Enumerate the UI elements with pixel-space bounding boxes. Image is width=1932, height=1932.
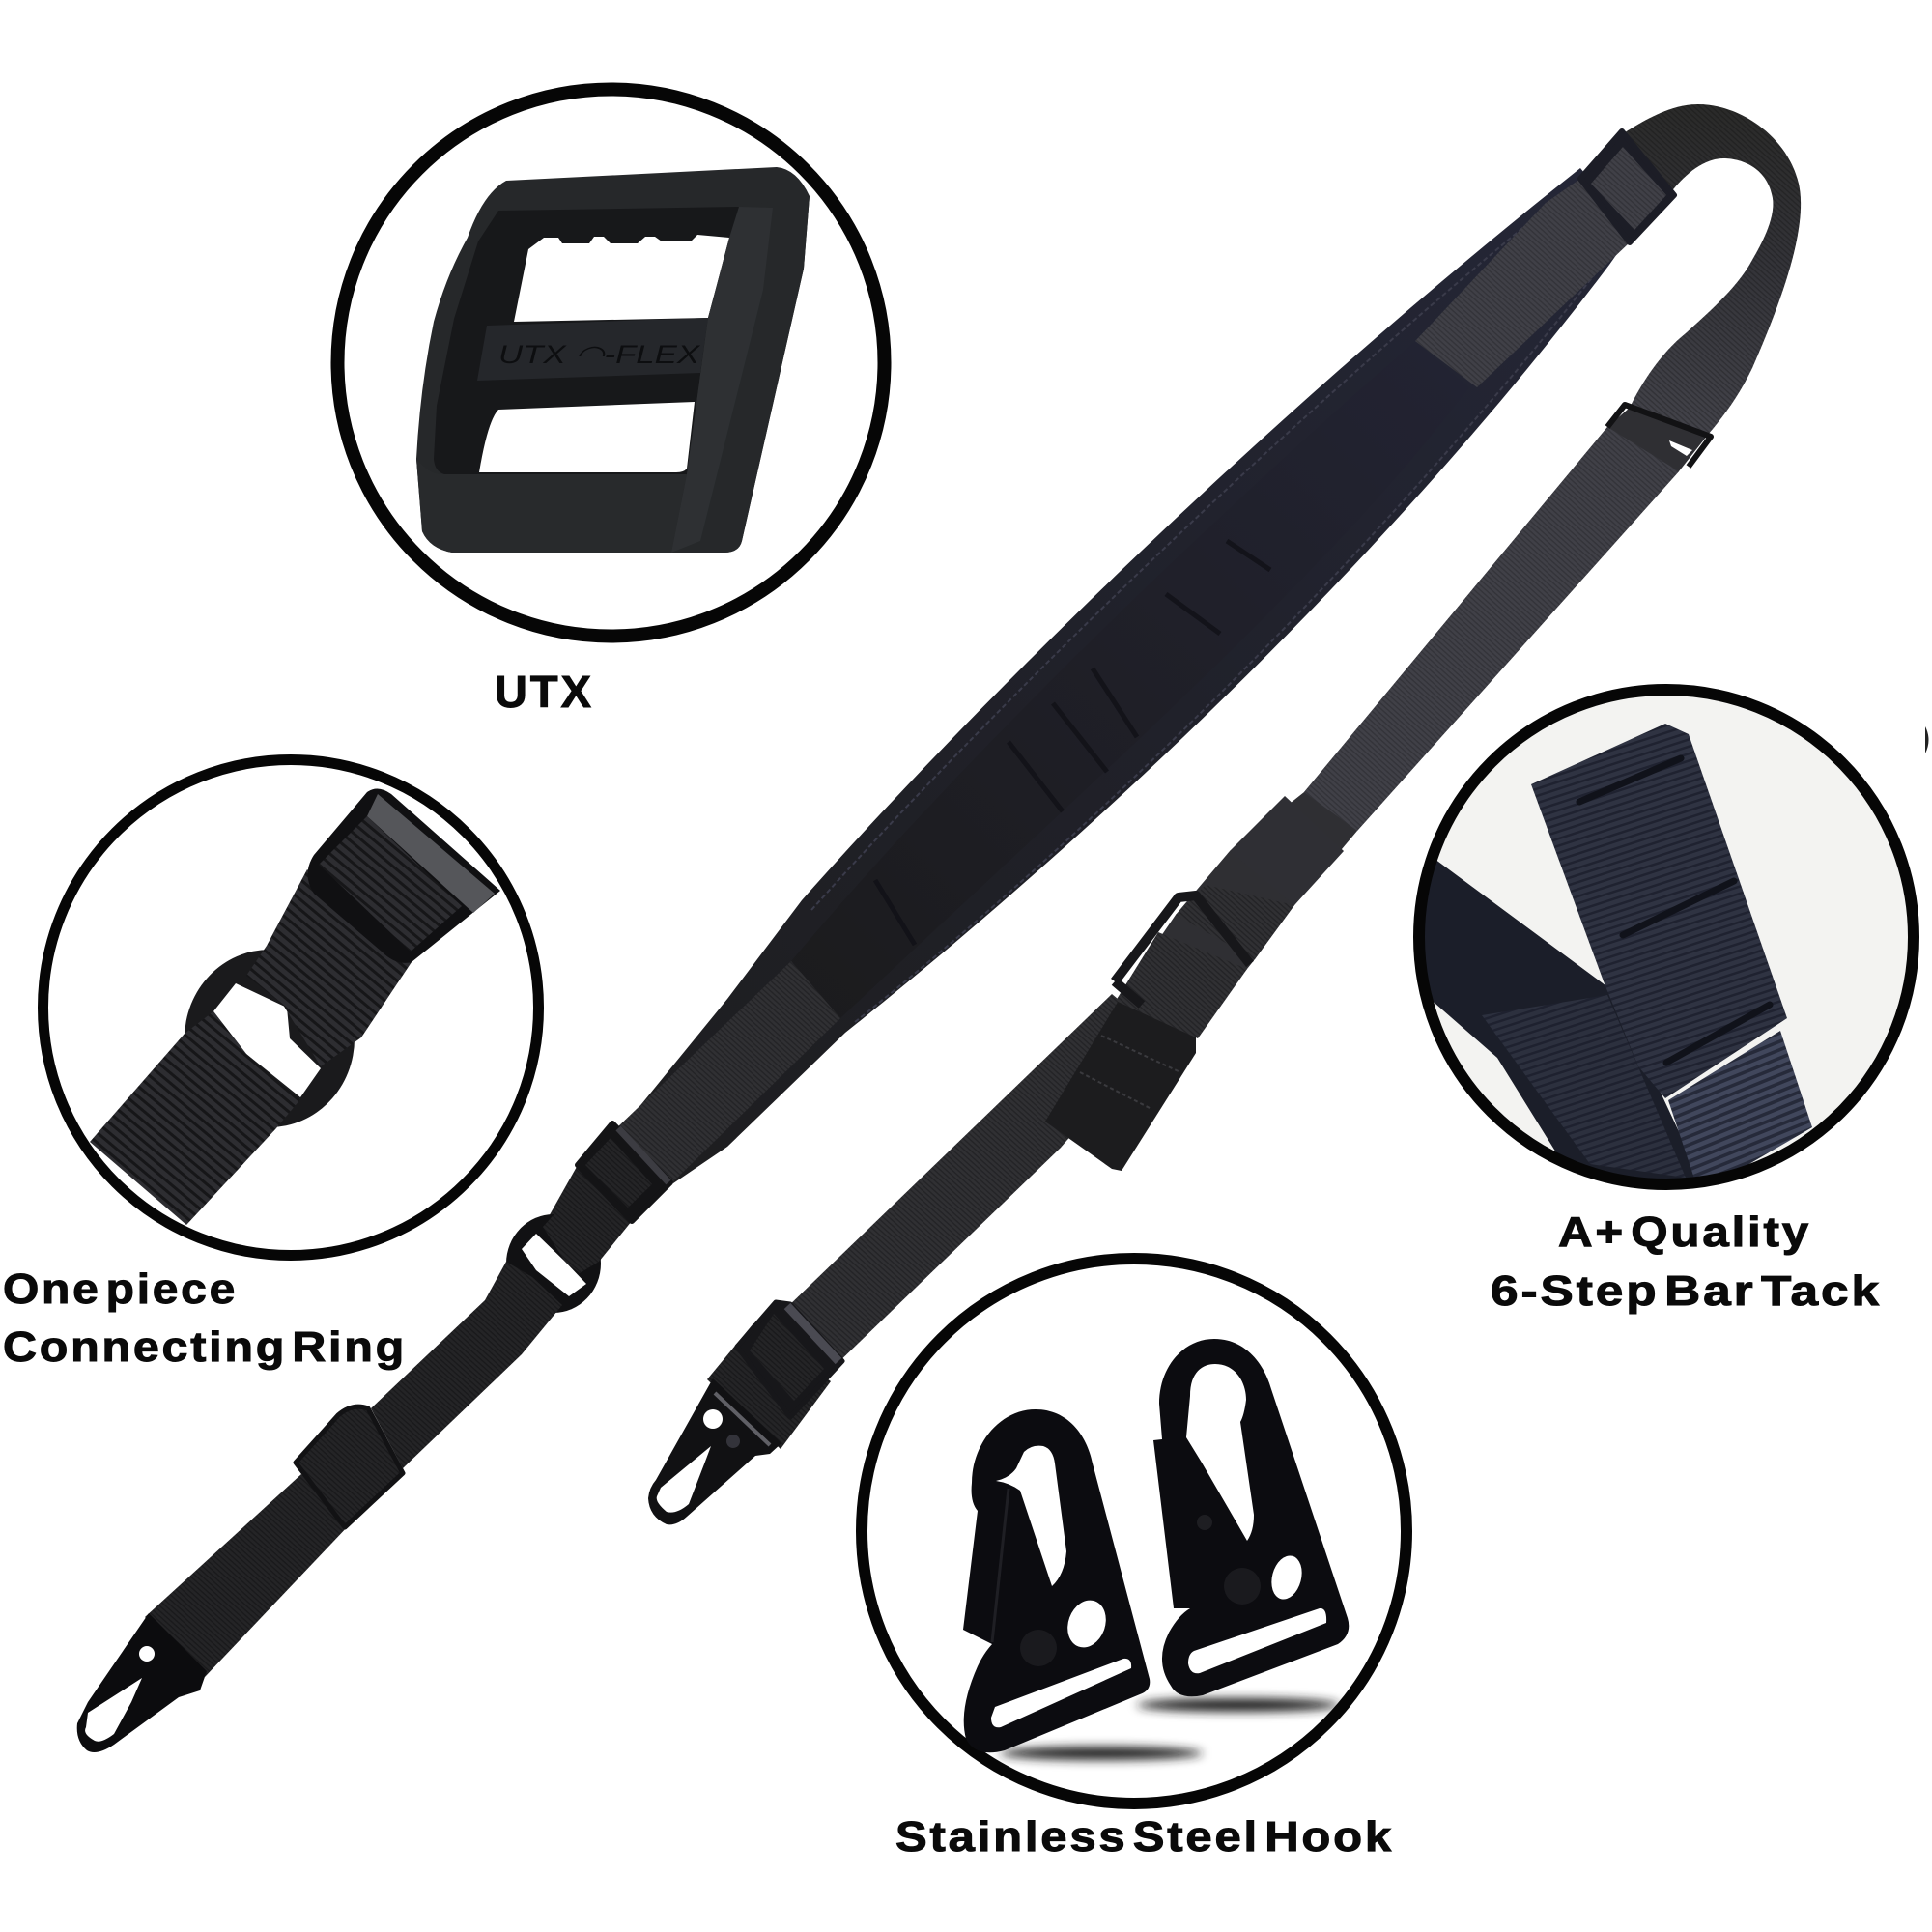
hook at bottom left bbox=[77, 1613, 207, 1752]
center bar with moulded brand text bbox=[477, 318, 708, 381]
strap between slider and ring bbox=[543, 1165, 632, 1262]
sewn tab bbox=[1045, 999, 1196, 1171]
panel: UTX buckle closeup bbox=[338, 89, 885, 636]
label: A+ Quality 6-Step Bar Tack bbox=[1491, 1208, 1882, 1315]
strap lower bbox=[90, 1011, 300, 1225]
ring bbox=[185, 950, 355, 1127]
strap under slider bbox=[707, 1323, 831, 1449]
panel: bar tack closeup bbox=[1410, 690, 1928, 1198]
label: One piece Connecting Ring: One piece bbox=[3, 1265, 238, 1313]
label: Stainless Steel Hook: Stainless Steel Hook bbox=[895, 1813, 1394, 1861]
circle frame bbox=[862, 1259, 1406, 1804]
lower slider bbox=[296, 1406, 403, 1527]
clipped contents bbox=[1410, 724, 1812, 1198]
circle frame bbox=[1419, 690, 1914, 1184]
clipped contents bbox=[90, 788, 500, 1225]
lower slider bbox=[737, 1302, 842, 1417]
pad center panel bbox=[791, 341, 1469, 1018]
grey webbing bbox=[1482, 995, 1686, 1178]
left hook bbox=[963, 1409, 1150, 1752]
label: A+ Quality 6-Step Bar Tack: 6-Step Bar Tack bbox=[1491, 1267, 1882, 1315]
second sling strap bbox=[648, 405, 1711, 1524]
folded block bbox=[1531, 724, 1787, 1098]
shadows bbox=[1000, 1698, 1340, 1760]
continuous strap underlay bbox=[1122, 408, 1708, 1031]
circle frame bbox=[43, 759, 539, 1256]
buckle highlight frame bbox=[367, 794, 495, 913]
pad wrinkles bbox=[875, 541, 1270, 945]
hook bbox=[648, 1378, 781, 1524]
panel: connecting ring closeup bbox=[43, 759, 539, 1256]
buckle recess bbox=[434, 207, 739, 474]
strap under buckle bbox=[1176, 885, 1294, 959]
main sling with padded shoulder section bbox=[77, 104, 1801, 1752]
small arc fragment bbox=[1925, 726, 1928, 753]
dark back strap bbox=[1425, 861, 1694, 1179]
label: One piece Connecting Ring bbox=[3, 1265, 407, 1371]
circle frame bbox=[338, 89, 885, 636]
label: One piece Connecting Ring: Connecting Ring bbox=[3, 1323, 407, 1371]
upper strap bbox=[1304, 427, 1679, 831]
buckle bbox=[307, 788, 500, 963]
lower webbing band bbox=[614, 961, 840, 1188]
photo background bbox=[1419, 690, 1914, 1184]
ring opening bbox=[213, 983, 321, 1097]
label: UTX: UTX bbox=[495, 667, 594, 717]
front frame right band bbox=[671, 207, 773, 553]
upper slider bbox=[578, 1123, 670, 1221]
folded section bbox=[1230, 796, 1344, 905]
strap in buckle bbox=[319, 816, 462, 952]
center bar with moulded brand text: UTX ◠-FLEX bbox=[498, 340, 700, 369]
panel: steel hook closeup bbox=[862, 1259, 1406, 1804]
lower opening bbox=[479, 402, 695, 472]
front webbing bbox=[1668, 1031, 1812, 1193]
connecting ring bbox=[506, 1188, 618, 1313]
buckle bbox=[1115, 895, 1250, 1005]
buckle strap bbox=[1116, 932, 1247, 1038]
strap to buckle bbox=[246, 869, 412, 1066]
bottom lip bbox=[416, 459, 687, 553]
right hook bbox=[1153, 1339, 1349, 1696]
shoulder pad bbox=[629, 168, 1633, 1183]
strap end bbox=[145, 1474, 350, 1677]
top adjuster slider bbox=[1580, 131, 1674, 242]
buckle body bbox=[416, 167, 810, 553]
strap below ring bbox=[371, 1262, 562, 1468]
upper webbing band bbox=[1415, 179, 1630, 387]
bar tacks bbox=[1579, 758, 1770, 1063]
upper opening bbox=[514, 235, 729, 322]
pad stitched seams bbox=[811, 193, 1594, 1022]
lower long strap bbox=[784, 994, 1159, 1370]
loop strap bbox=[1613, 104, 1801, 435]
slider on upper strap bbox=[1607, 405, 1711, 467]
right side face bbox=[671, 196, 810, 553]
label: A+ Quality 6-Step Bar Tack: A+ Quality bbox=[1558, 1208, 1811, 1256]
